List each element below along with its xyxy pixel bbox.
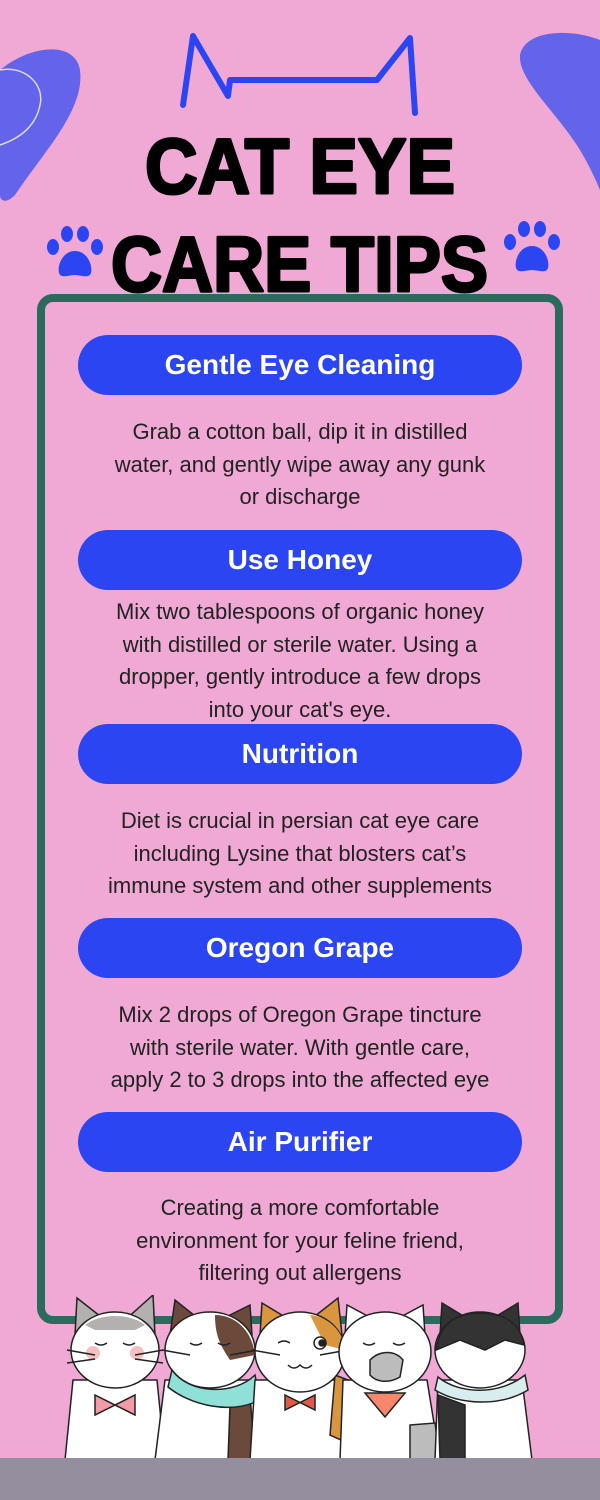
pill: Gentle Eye Cleaning: Gentle Eye Cleaning bbox=[165, 349, 435, 380]
icon: cat ears bbox=[180, 33, 418, 116]
text: nutrition bbox=[108, 808, 492, 898]
icon: paw left bbox=[47, 226, 103, 276]
text: air purifier: Creating a more comfortable bbox=[161, 1195, 439, 1220]
pill: Oregon Grape: Oregon Grape bbox=[206, 932, 394, 963]
pill: Air Purifier: Air Purifier bbox=[228, 1126, 372, 1157]
pill: Nutrition: Nutrition bbox=[242, 738, 358, 769]
text: nutrition: immune system and other supplements bbox=[108, 873, 492, 898]
text: air purifier: filtering out allergens bbox=[198, 1260, 402, 1285]
text: honey: with distilled or sterile water. Using a bbox=[123, 632, 477, 656]
text: oregon grape bbox=[111, 1002, 489, 1092]
icon: paw right bbox=[504, 221, 560, 272]
text: honey: Mix two tablespoons of organic honey bbox=[116, 599, 484, 624]
text: cleaning: Grab a cotton ball, dip it in distilled bbox=[132, 419, 468, 444]
decorative blobs bbox=[0, 32, 600, 201]
pill: Air Purifier bbox=[78, 1112, 522, 1172]
text: cleaning: or discharge bbox=[239, 484, 361, 509]
text: cleaning: water, and gently wipe away any gunk bbox=[115, 452, 485, 476]
text: oregon grape: Mix 2 drops of Oregon Grape tincture bbox=[118, 1002, 482, 1027]
title bbox=[111, 122, 488, 300]
text: honey: dropper, gently introduce a few drops bbox=[119, 664, 481, 689]
text: air purifier bbox=[136, 1195, 464, 1285]
text: air purifier: environment for your feline friend, bbox=[136, 1228, 464, 1252]
footer band bbox=[0, 1458, 600, 1500]
text: oregon grape: with sterile water. With gentle care, bbox=[130, 1034, 470, 1060]
pill: Oregon Grape bbox=[78, 918, 522, 978]
text: honey bbox=[116, 599, 484, 722]
illustration: five cats bbox=[64, 1295, 532, 1458]
title: CAT EYE bbox=[145, 122, 455, 210]
text: honey: into your cat's eye. bbox=[209, 696, 391, 722]
pill: Use Honey bbox=[78, 530, 522, 590]
text: nutrition: including Lysine that blosters cat’s bbox=[134, 840, 466, 866]
text: nutrition: Diet is crucial in persian cat eye care bbox=[121, 808, 479, 833]
pill: Nutrition bbox=[78, 724, 522, 784]
panel: tips bbox=[37, 294, 563, 1324]
pill: Gentle Eye Cleaning bbox=[78, 335, 522, 395]
pill: Use Honey: Use Honey bbox=[228, 544, 372, 575]
text: cleaning bbox=[114, 419, 486, 509]
text: oregon grape: apply 2 to 3 drops into the affected eye bbox=[111, 1067, 489, 1092]
